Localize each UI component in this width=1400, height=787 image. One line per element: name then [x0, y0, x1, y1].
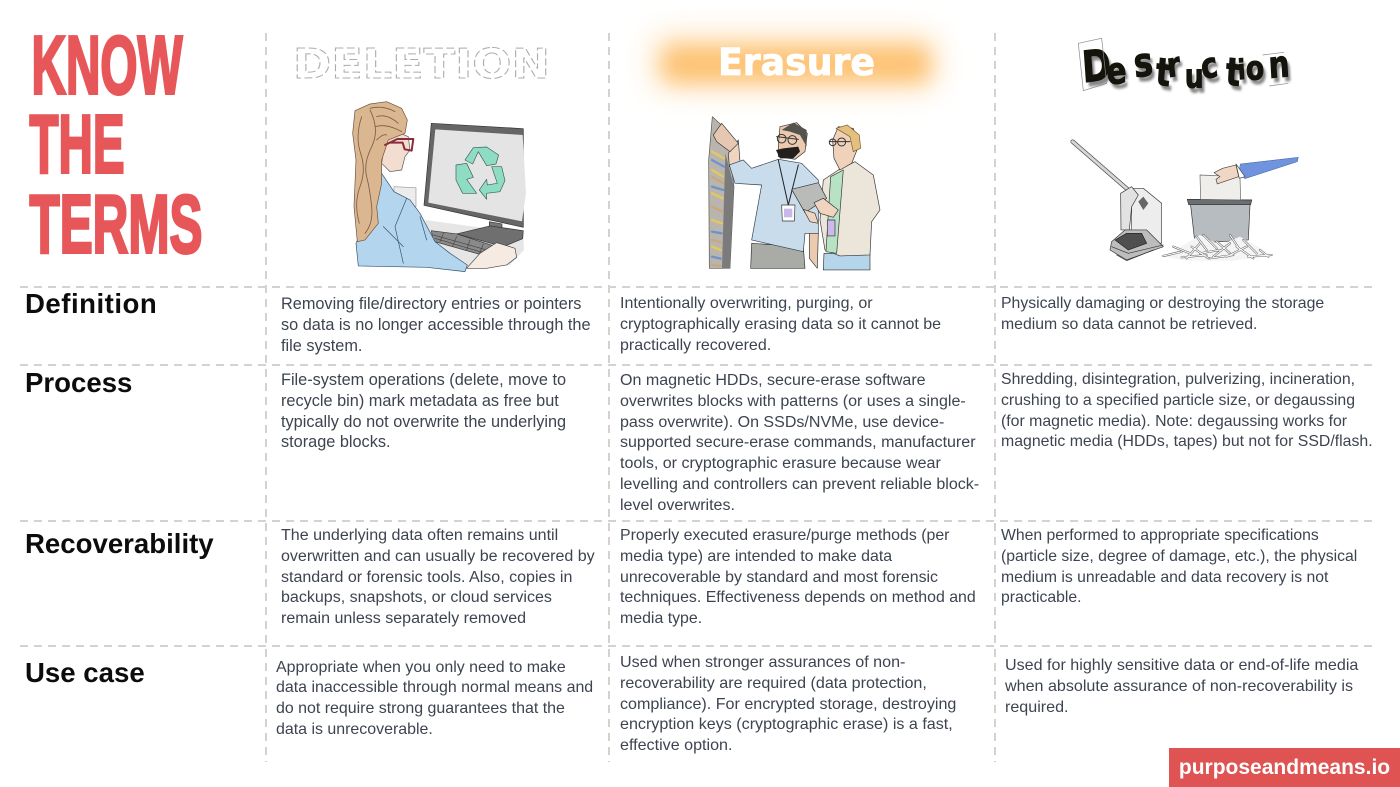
definition: erasure: cryptographically erasing data so it cannot be — [620, 316, 941, 333]
heading: destruction: o — [1249, 54, 1267, 93]
process: deletion — [281, 371, 566, 451]
process: destruction: (for magnetic media). Note: degaussing works for — [1001, 413, 1347, 430]
process: deletion: storage blocks. — [281, 433, 391, 451]
heading: destruction: n — [1270, 47, 1293, 91]
heading: destruction: t — [1224, 50, 1242, 96]
process: erasure: tools, or cryptographic erasure because wear — [620, 454, 941, 472]
recoverability: destruction: When performed to appropriate specifications — [1001, 527, 1319, 544]
logo: purposeandmeans.io — [1169, 748, 1400, 787]
heading: destruction: t — [1157, 55, 1175, 101]
illustration: press and paper shredder — [1073, 142, 1298, 261]
definition: deletion: Removing file/directory entries or pointers — [281, 295, 581, 313]
recoverability: deletion: standard or forensic tools. Also, copies in — [281, 568, 572, 586]
recoverability: deletion: overwritten and can usually be recovered by — [281, 547, 595, 565]
heading: destruction: u — [1185, 58, 1204, 96]
process: destruction — [1001, 371, 1373, 450]
use case: erasure: encryption keys (cryptographic erase) is a fast, — [620, 715, 953, 733]
row heading: recoverability: Recoverability — [25, 528, 214, 559]
recoverability: deletion: The underlying data often remains until — [281, 526, 558, 544]
heading: destruction: c — [1198, 45, 1220, 88]
heading: destruction: e — [1105, 48, 1128, 93]
definition: destruction — [1001, 295, 1324, 333]
process: destruction: Shredding, disintegration, pulverizing, incineration, — [1001, 371, 1355, 388]
recoverability: erasure: Properly executed erasure/purge methods (per — [620, 527, 949, 544]
heading: destruction — [1078, 37, 1293, 101]
process: destruction: magnetic media (HDDs, tapes) but not for SSD/flash. — [1001, 433, 1373, 450]
definition: destruction: medium so data cannot be retrieved. — [1001, 316, 1257, 333]
use case: erasure: effective option. — [620, 736, 732, 754]
use case: destruction: when absolute assurance of non-recoverability is — [1005, 677, 1353, 695]
illustration: woman at computer with recycle icon — [353, 102, 526, 272]
row heading: use case: Use case — [25, 656, 145, 688]
recoverability: erasure: techniques. Effectiveness depends on method and — [620, 589, 976, 606]
recoverability: erasure: unrecoverable by standard and most forensic — [620, 569, 938, 586]
title: know the terms: TERMS — [30, 178, 202, 270]
heading: erasure with orange glow: Erasure — [718, 41, 875, 84]
definition: erasure: Intentionally overwriting, purging, or — [620, 295, 873, 312]
heading: destruction: c — [1201, 50, 1223, 93]
use case: erasure: Used when stronger assurances of non- — [620, 653, 905, 671]
heading: destruction: n — [1267, 42, 1291, 87]
process: erasure: On magnetic HDDs, secure-erase software — [620, 371, 926, 389]
process: erasure: supported secure-erase commands, manufacturer — [620, 433, 976, 451]
use case: erasure: recoverability are required (data protection, — [620, 674, 927, 692]
definition: deletion: so data is no longer accessible through the — [281, 316, 591, 334]
recoverability: erasure: media type) are intended to make data — [620, 548, 892, 565]
heading: destruction: t — [1227, 55, 1245, 100]
recoverability: erasure — [620, 527, 976, 627]
heading: destruction: D — [1080, 41, 1113, 93]
recoverability: deletion: backups, snapshots, or cloud services — [281, 588, 552, 606]
process: deletion: typically do not overwrite the underlying — [281, 413, 566, 431]
process: deletion: recycle bin) mark metadata as free but — [281, 392, 559, 410]
heading: destruction: s — [1132, 37, 1155, 87]
recoverability: destruction: medium is unreadable and data recovery is not — [1001, 569, 1328, 586]
recoverability: erasure: media type. — [620, 610, 702, 627]
heading: erasure with orange glow — [650, 32, 940, 92]
definition: erasure — [620, 295, 941, 354]
heading: destruction: e — [1108, 53, 1130, 98]
heading: destruction: u — [1187, 63, 1206, 101]
process: destruction: crushing to a specified particle size, or degaussing — [1001, 392, 1355, 409]
process: erasure: overwrites blocks with patterns (or uses a single- — [620, 392, 966, 410]
use case: erasure: compliance). For encrypted storage, destroying — [620, 695, 956, 713]
heading: destruction: r — [1165, 45, 1182, 86]
definition: deletion: file system. — [281, 337, 362, 355]
recoverability: destruction: (particle size, degree of damage, etc.), the physical — [1001, 548, 1357, 565]
definition: erasure: practically recovered. — [620, 337, 771, 354]
process: deletion: File-system operations (delete, move to — [281, 371, 566, 389]
illustration: two technicians at a server rack — [709, 117, 880, 270]
recoverability: destruction — [1001, 527, 1357, 606]
use case: deletion — [276, 658, 593, 738]
heading: destruction: t — [1154, 50, 1172, 96]
definition: deletion — [281, 295, 591, 355]
use case: deletion: do not require strong guarantees that the — [276, 700, 565, 717]
row heading: process: Process — [25, 366, 132, 398]
process: erasure: levelling and controllers can prevent reliable block- — [620, 475, 979, 493]
logo: purposeandmeans.io: purposeandmeans.io — [1179, 756, 1390, 779]
heading: deletion: DELETION — [293, 40, 550, 88]
heading: destruction: s — [1134, 42, 1157, 92]
heading: destruction: r — [1168, 50, 1185, 91]
heading: destruction: i — [1240, 58, 1249, 91]
recoverability: destruction: practicable. — [1001, 589, 1082, 606]
definition: destruction: Physically damaging or destroying the storage — [1001, 295, 1324, 312]
title: know the terms — [30, 18, 202, 270]
use case: deletion: data inaccessible through normal means and — [276, 679, 593, 696]
use case: deletion: data is unrecoverable. — [276, 721, 433, 738]
process: erasure — [620, 371, 979, 514]
recoverability: deletion: remain unless separately removed — [281, 609, 526, 627]
process: erasure: pass overwrite). On SSDs/NVMe, use device- — [620, 413, 944, 431]
row heading: definition: Definition — [25, 288, 157, 319]
recoverability: deletion — [281, 526, 595, 627]
heading: destruction: D — [1083, 45, 1115, 98]
use case: erasure — [620, 653, 956, 754]
use case: deletion: Appropriate when you only need to make — [276, 658, 566, 676]
title: know the terms: THE — [30, 98, 124, 190]
heading: destruction: o — [1246, 50, 1264, 88]
use case: destruction — [1005, 656, 1358, 716]
title: know the terms: KNOW — [32, 18, 183, 112]
heading: destruction: i — [1237, 53, 1246, 86]
use case: destruction: required. — [1005, 698, 1069, 716]
process: erasure: level overwrites. — [620, 496, 735, 514]
use case: destruction: Used for highly sensitive data or end-of-life media — [1005, 656, 1358, 674]
